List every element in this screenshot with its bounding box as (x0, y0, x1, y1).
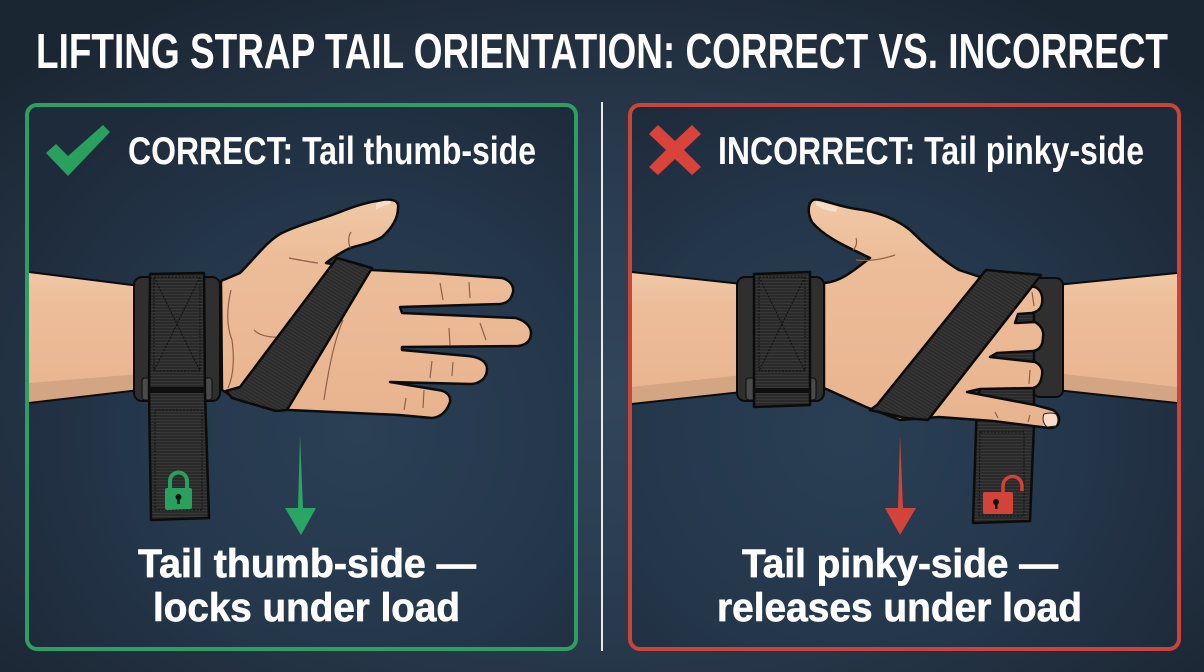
illustration: diagonal strap (226, 258, 372, 411)
icon: red cross (649, 125, 701, 175)
caption: incorrect: Tail pinky-side — (742, 542, 1058, 586)
illustration: fingers and palm (809, 199, 1059, 428)
icon: open padlock (983, 476, 1022, 514)
illustration: far cuff (1033, 278, 1063, 397)
illustration: diagonal strap (870, 270, 1041, 420)
caption: incorrect: releases under load (717, 586, 1082, 630)
panel heading: correct: CORRECT: Tail thumb-side (128, 130, 536, 173)
caption: correct: Tail thumb-side — (138, 542, 476, 586)
divider (601, 102, 603, 651)
panel: correct (27, 105, 576, 649)
panel: incorrect (630, 105, 1179, 649)
icon: closed padlock (165, 472, 192, 510)
illustration: wrist cuff (737, 272, 824, 407)
illustration: forearm (29, 272, 140, 403)
illustration: forearm and far arm (632, 272, 1177, 404)
arrow: red down (885, 435, 916, 535)
illustration: hanging tail (973, 310, 1034, 523)
caption: correct (138, 542, 476, 630)
arrow: green down (285, 435, 316, 535)
panel frame: incorrect (630, 105, 1179, 649)
panel frame: correct (27, 105, 576, 649)
icon: green check mark (46, 125, 110, 176)
illustration: hand (221, 200, 531, 418)
illustration: wrist cuff with hanging tail (134, 273, 220, 520)
caption: incorrect (717, 542, 1082, 630)
caption: correct: locks under load (153, 586, 460, 630)
